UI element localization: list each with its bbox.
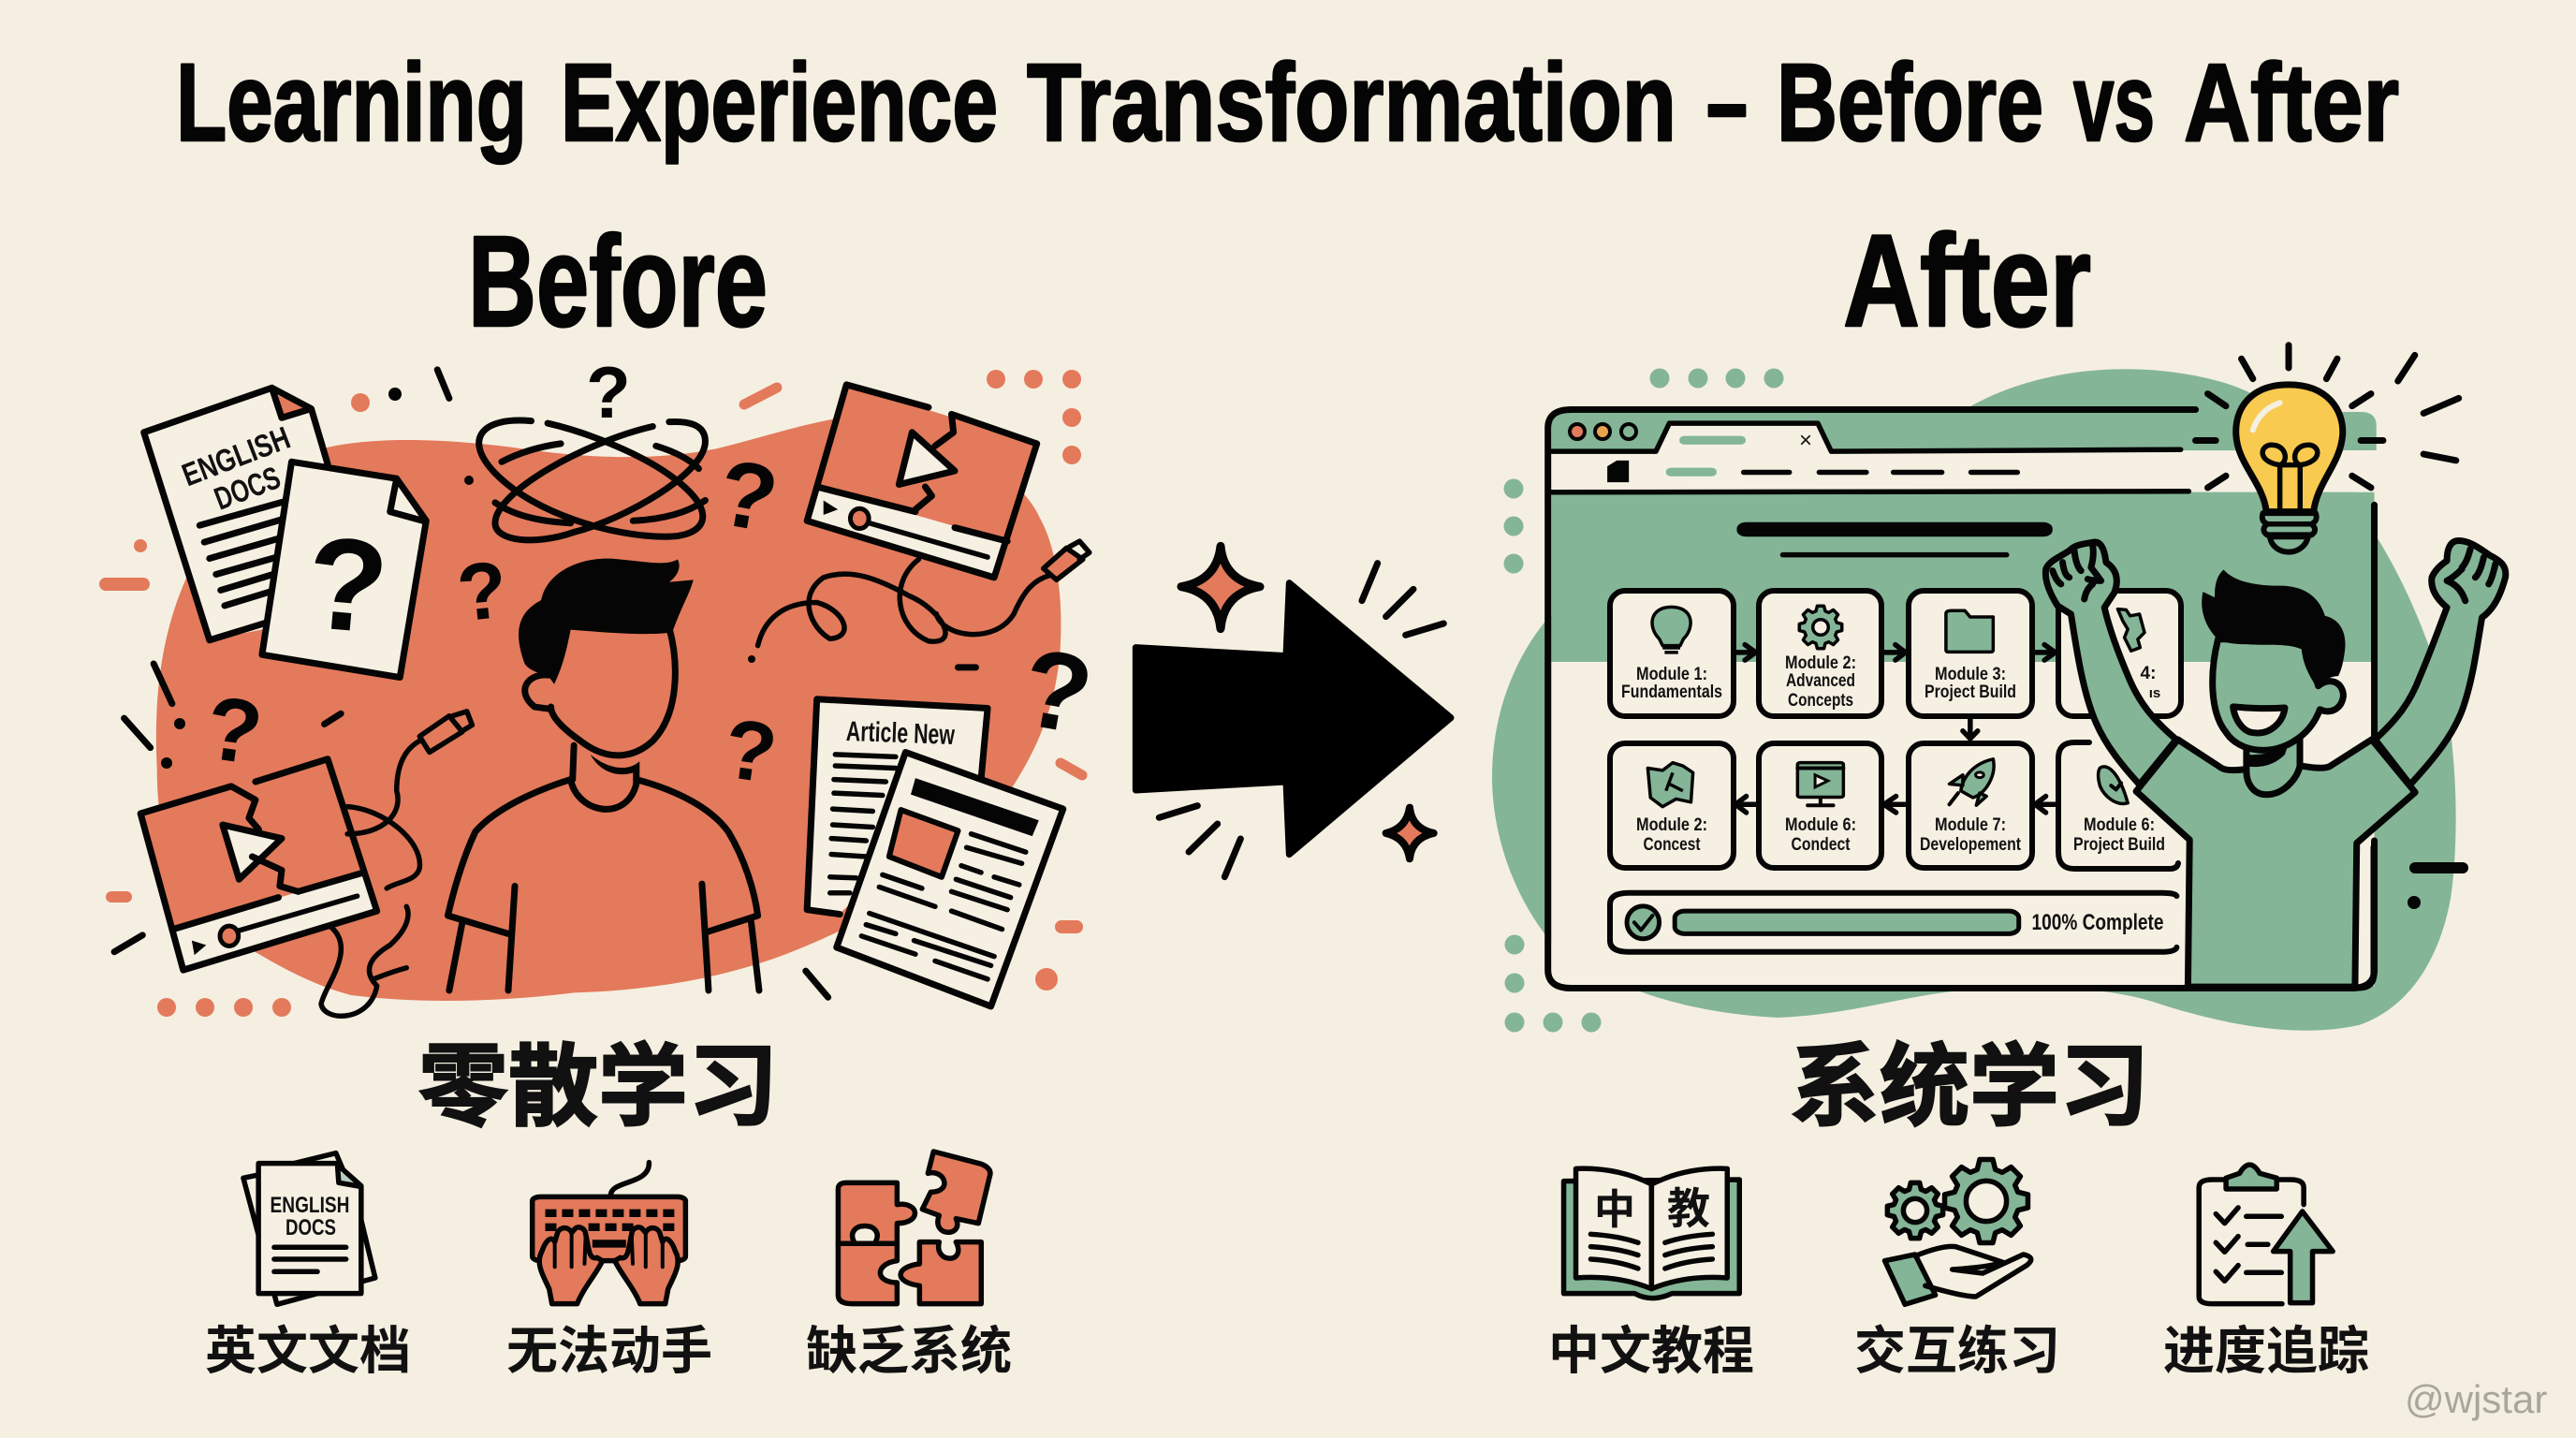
neck and collar — [2247, 733, 2300, 795]
content heading bars — [1736, 522, 2053, 536]
panel: after illustration — [1492, 345, 2506, 1032]
label: 进度追踪: 进度追踪 — [2163, 1322, 2369, 1380]
icon: open book — [1564, 1168, 1739, 1299]
tab and address bar details — [1679, 436, 1746, 445]
module 7 card: Module 7: — [1935, 815, 2006, 835]
module 1 card: Fundamentals — [1621, 682, 1722, 702]
module 1 card: Module 1: — [1636, 665, 1707, 684]
scattered dots and dashes — [99, 370, 1083, 1017]
module 2 concept card: Concest — [1644, 835, 1701, 855]
module 3 card — [1909, 591, 2032, 716]
transformation arrow — [1135, 546, 1451, 877]
progress bar — [1610, 893, 2176, 952]
progress bar: 100% Complete — [2031, 910, 2164, 935]
icon: English docs: ENGLISH — [270, 1193, 350, 1218]
left hand — [539, 1227, 603, 1304]
question marks: ? — [710, 440, 785, 552]
right hand — [615, 1227, 678, 1304]
watermark: @wjstar — [2405, 1377, 2547, 1421]
title: vs — [2073, 41, 2155, 165]
right browser edge beside person — [2186, 847, 2374, 988]
left arm — [2045, 542, 2176, 785]
module 6 project card, partly hidden: Module 6: — [2084, 815, 2155, 835]
question marks: ? — [586, 351, 631, 433]
question marks — [199, 351, 1101, 801]
module 6 conduct card: Condect — [1792, 835, 1851, 855]
scattered green dots and marks — [1503, 369, 2468, 1032]
browser window — [1548, 410, 2377, 989]
title: Transformation — [1027, 41, 1676, 165]
icon: English docs: DOCS — [285, 1215, 336, 1240]
title: – — [1706, 41, 1748, 165]
left fist fingers — [2053, 546, 2101, 599]
document: English docs — [144, 388, 338, 640]
module 2 concept card: Module 2: — [1636, 815, 1707, 835]
heading: Before: Before — [468, 210, 768, 354]
heading: 系统学习: 系统学习 — [1790, 1037, 2149, 1137]
broken video player top right — [807, 385, 1037, 578]
label: 缺乏系统: 缺乏系统 — [806, 1322, 1012, 1380]
title: Before — [1777, 41, 2043, 165]
title: Learning — [176, 41, 527, 165]
coral background blob — [156, 414, 1061, 1001]
module 1 card — [1610, 591, 1734, 716]
module 6 project card, partly hidden — [2058, 742, 2181, 869]
label: 交互练习: 交互练习 — [1854, 1322, 2060, 1380]
module 2 card — [1759, 591, 1881, 716]
person celebrating — [2045, 540, 2506, 987]
title: After — [2184, 41, 2399, 165]
module 6 conduct card — [1759, 743, 1881, 868]
heading: 零散学习: 零散学习 — [418, 1037, 778, 1137]
icon: clipboard progress — [2199, 1165, 2333, 1304]
module 6 project card, partly hidden: Project Build — [2073, 835, 2165, 855]
document: question page: ? — [301, 508, 393, 661]
document: English docs: ENGLISH — [178, 420, 295, 493]
panel: before illustration — [99, 351, 1101, 1017]
right arm — [2375, 540, 2506, 785]
label: 英文文档: 英文文档 — [205, 1322, 411, 1380]
module 2 card: Concepts — [1788, 691, 1853, 711]
icon: keyboard and hands — [533, 1163, 685, 1304]
icon: English docs — [243, 1153, 375, 1304]
question marks: ? — [718, 702, 783, 801]
icon: gears and hand — [1884, 1160, 2031, 1304]
module 4 card, partly hidden: ıs — [2149, 685, 2160, 701]
module 2 card: Module 2: — [1785, 653, 1856, 673]
person confused — [447, 559, 759, 990]
module 2 concept card — [1610, 743, 1734, 868]
burst ticks — [1159, 564, 1443, 877]
module 2 card: Advanced — [1786, 671, 1855, 691]
heading: After: After — [1843, 207, 2091, 354]
shirt — [2136, 740, 2415, 987]
sparkle bottom right — [1386, 808, 1434, 858]
article page — [807, 699, 988, 915]
question marks: ? — [1013, 625, 1101, 758]
module card grid arrows — [1734, 645, 2057, 813]
tangled cable top right — [758, 541, 1090, 646]
article page: Article New — [845, 716, 956, 751]
right fist fingers — [2447, 549, 2496, 601]
tangled cable bottom left — [321, 712, 472, 1016]
newspaper page — [837, 753, 1063, 1006]
confused orbit scribble — [479, 420, 705, 540]
module 7 card — [1909, 743, 2032, 868]
face — [2213, 639, 2343, 750]
lightbulb — [2196, 345, 2459, 552]
title: Experience — [561, 41, 998, 165]
module 4 card, partly hidden — [2058, 591, 2181, 716]
document: question page — [262, 462, 426, 678]
document: English docs: DOCS — [210, 460, 285, 518]
title — [176, 41, 2399, 165]
broken video player bottom left — [140, 759, 377, 970]
browser window: × — [1799, 428, 1812, 453]
label: 中文教程: 中文教程 — [1548, 1322, 1754, 1380]
module 6 conduct card: Module 6: — [1785, 815, 1856, 835]
bulb rays — [2196, 345, 2459, 488]
module cards — [1610, 591, 2181, 869]
smile — [2233, 707, 2285, 733]
module 3 card: Module 3: — [1935, 665, 2006, 684]
icon: puzzle pieces — [838, 1152, 990, 1304]
icon: open book: 教 — [1667, 1184, 1710, 1233]
question marks: ? — [199, 677, 268, 785]
green background blob — [1492, 369, 2456, 1031]
browser header band — [1551, 412, 2377, 450]
module 4 card, partly hidden: 4: — [2141, 664, 2156, 683]
icon: open book: 中 — [1594, 1187, 1635, 1233]
hair — [2202, 570, 2345, 688]
label: 无法动手: 无法动手 — [506, 1322, 712, 1380]
question marks: ? — [453, 545, 511, 638]
sparkle top left — [1181, 546, 1260, 629]
module 3 card: Project Build — [1925, 682, 2016, 702]
module 7 card: Developement — [1920, 835, 2022, 855]
